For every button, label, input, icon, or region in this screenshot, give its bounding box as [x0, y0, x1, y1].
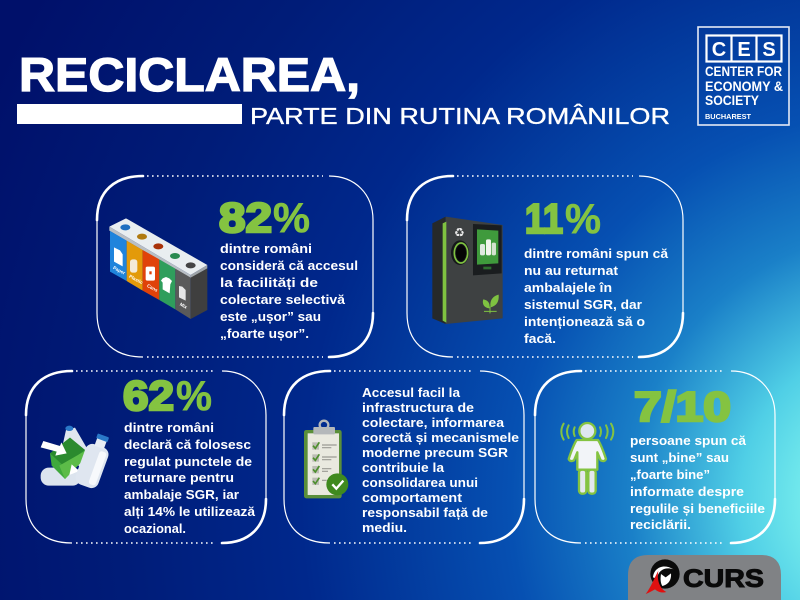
- panel frame: [535, 371, 775, 543]
- text block: regulile și beneficiile: [630, 501, 765, 516]
- statistic 82%: [219, 194, 310, 241]
- text block: infrastructura de: [362, 400, 474, 415]
- swirl mark: [646, 559, 680, 594]
- text block: ambalajele în: [524, 280, 612, 295]
- text block: corectă și mecanismele: [362, 430, 519, 445]
- text block: dintre români: [220, 241, 312, 256]
- text block: ambalaje SGR, iar: [124, 487, 239, 502]
- title: [17, 48, 670, 129]
- bin labels: Mix: [179, 302, 188, 310]
- logo: CES: [698, 27, 789, 125]
- panel frame: [284, 371, 524, 543]
- text block: la facilități de: [220, 275, 318, 290]
- bin labels: Plastic: [128, 274, 144, 285]
- statistic 62%: 62: [123, 372, 174, 419]
- text block: returnare pentru: [124, 470, 234, 485]
- statistic 62%: %: [176, 372, 212, 419]
- icon: reverse vending machine: [432, 217, 503, 324]
- text block: consideră că accesul: [220, 258, 358, 273]
- text block: regulat punctele de: [124, 454, 252, 469]
- panel frame: [97, 176, 373, 357]
- icon: bottles and return box: [41, 426, 114, 490]
- bin labels: Cans: [146, 283, 159, 293]
- white title bar: [17, 104, 242, 124]
- statistic 82%: 82: [219, 194, 272, 241]
- icon: clipboard checklist: [304, 421, 348, 498]
- text block: declară că folosesc: [124, 437, 251, 452]
- text block: facă.: [524, 331, 556, 346]
- text block: sistemul SGR, dar: [524, 297, 642, 312]
- text block: dintre români: [124, 420, 214, 435]
- text block: „foarte ușor”.: [220, 326, 309, 341]
- text block: dintre români spun că: [524, 246, 669, 261]
- text block: moderne precum SGR: [362, 445, 508, 460]
- logo: CES: S: [762, 39, 776, 61]
- text block: contribuie la: [362, 460, 445, 475]
- logo: CES: SOCIETY: [705, 92, 760, 108]
- text block: sunt „bine” sau: [630, 450, 729, 465]
- bin labels: Paper: [112, 265, 126, 276]
- text block: [220, 241, 358, 341]
- text block: responsabil față de: [362, 505, 488, 520]
- text block: „foarte bine”: [630, 467, 710, 482]
- logo: CES: C: [712, 39, 726, 61]
- bin labels: [112, 265, 188, 310]
- panel: access text: [284, 371, 524, 543]
- logo: CURS badge: [628, 555, 781, 600]
- panel: 7/10: [535, 371, 775, 543]
- text block: comportament: [362, 490, 463, 505]
- text block: [630, 433, 765, 532]
- text block: [124, 420, 256, 536]
- statistic 7/10: 7/10: [634, 383, 731, 430]
- text block: nu au returnat: [524, 263, 619, 278]
- text block: Accesul facil la: [362, 385, 461, 400]
- panel: 62%: [26, 371, 266, 543]
- logo: CES: E: [737, 39, 751, 61]
- text block: ocazional.: [124, 521, 186, 536]
- statistic 11%: %: [565, 195, 601, 242]
- text block: [362, 385, 519, 535]
- logo: CES: ECONOMY &: [705, 78, 783, 94]
- text block: consolidarea unui: [362, 475, 478, 490]
- panel: 82%: [97, 176, 373, 357]
- text block: informate despre: [630, 484, 744, 499]
- statistic 62%: [123, 372, 212, 419]
- text block: persoane spun că: [630, 433, 747, 448]
- icon: reverse vending machine: ♻: [454, 225, 465, 239]
- text block: reciclării.: [630, 517, 691, 532]
- text block: mediu.: [362, 520, 407, 535]
- text block: colectare selectivă: [220, 292, 346, 307]
- wordmark: CURS: [683, 565, 764, 593]
- text block: intenționează să o: [524, 314, 645, 329]
- icon: selective collection bins: [109, 218, 207, 319]
- logo: CES: CENTER FOR: [705, 63, 782, 79]
- text block: alți 14% le utilizează: [124, 504, 256, 519]
- icon: informed person: [561, 423, 613, 494]
- statistic 11%: [525, 195, 601, 242]
- text block: este „ușor” sau: [220, 309, 321, 324]
- logo: CES: BUCHAREST: [705, 112, 751, 121]
- text block: [524, 246, 669, 346]
- statistic 82%: %: [273, 194, 310, 241]
- text block: colectare, informarea: [362, 415, 505, 430]
- panel frame: [26, 371, 266, 543]
- statistic 11%: 11: [525, 195, 563, 242]
- panel frame: [407, 176, 683, 357]
- panel: 11%: [407, 176, 683, 357]
- subtitle: PARTE DIN RUTINA ROMÂNILOR: [250, 103, 670, 129]
- heading: Reciclarea: RECICLAREA,: [19, 48, 360, 101]
